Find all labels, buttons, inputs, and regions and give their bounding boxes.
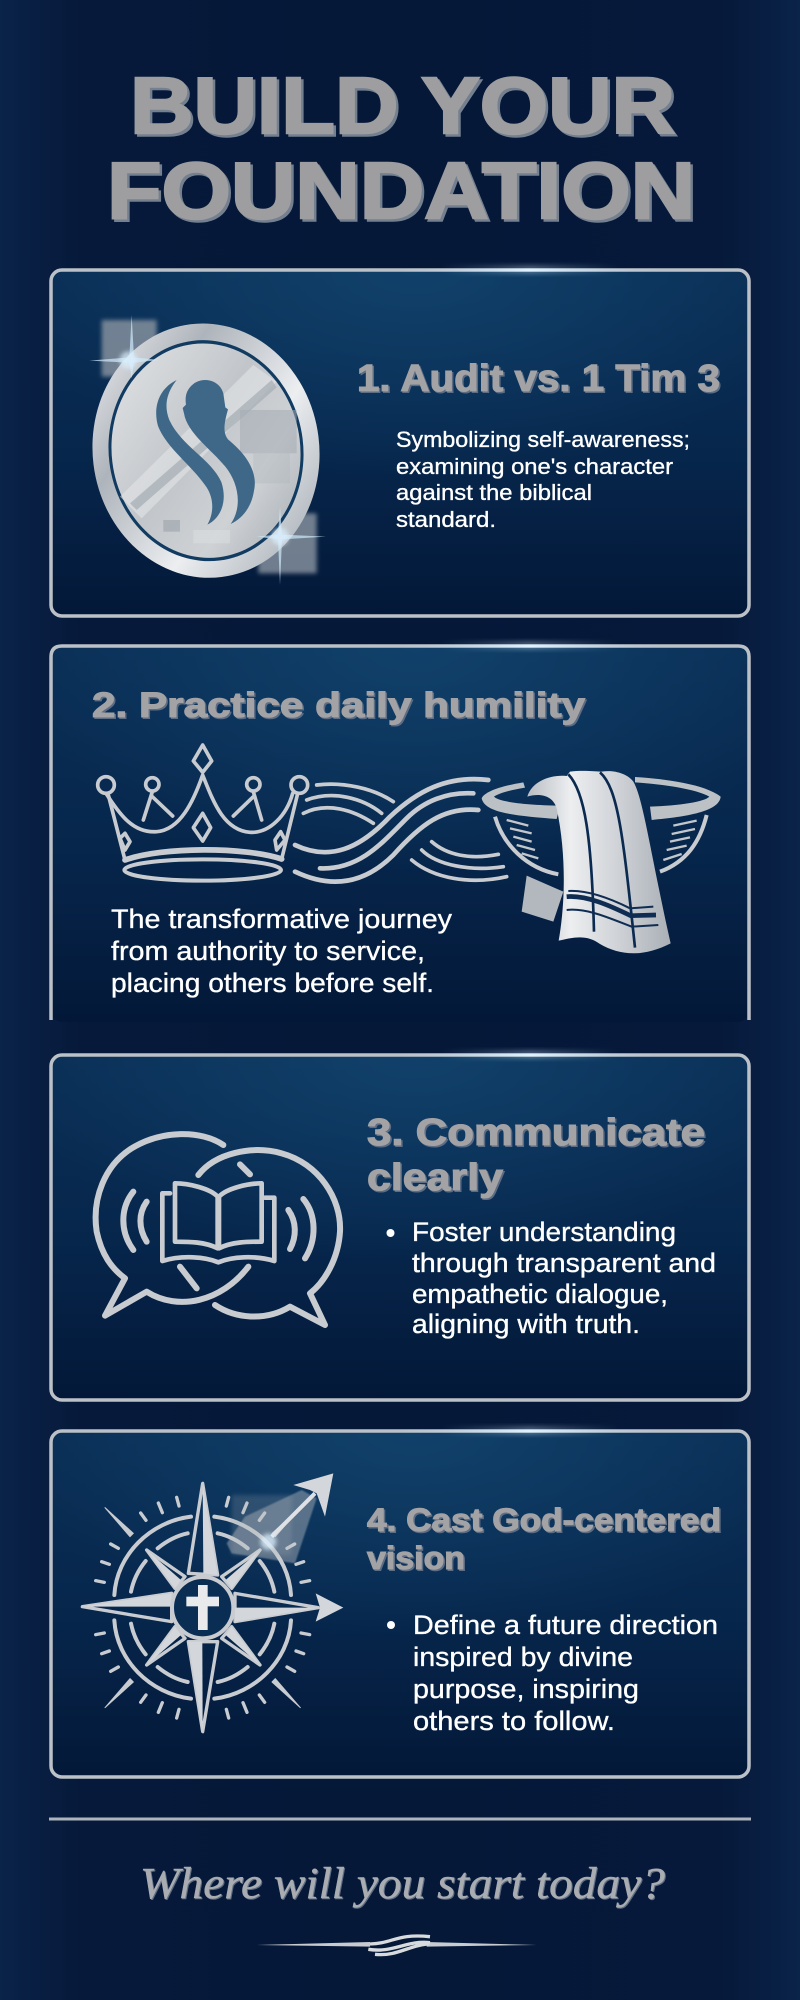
heading 2: 2. Practice daily humility — [94, 688, 587, 726]
heading 2: 2. Practice daily humility — [92, 686, 586, 725]
text 4 — [387, 1610, 718, 1736]
text 1: examining one's character — [396, 454, 674, 479]
icon: interwoven waves — [295, 779, 507, 882]
heading 4: 4. Cast God-centered — [367, 1502, 721, 1538]
text 4: inspired by divine — [413, 1642, 633, 1672]
icon: mirror coin — [78, 310, 334, 591]
heading 3: 3. Communicate — [367, 1112, 705, 1154]
text 2: from authority to service, — [111, 936, 425, 966]
panel 2: humility — [51, 641, 749, 1022]
divider — [49, 1818, 751, 1820]
closing question: Where will you start today? — [141, 1860, 666, 1909]
icon: basin and towel — [482, 771, 721, 953]
text 4: others to follow. — [413, 1706, 615, 1736]
panel 3: communicate — [51, 1050, 749, 1400]
text 2 — [111, 904, 453, 998]
icon: speech bubbles with book — [96, 1134, 340, 1325]
heading 3 — [367, 1112, 706, 1200]
text 2: placing others before self. — [111, 968, 434, 998]
text 3: aligning with truth. — [412, 1309, 640, 1339]
heading 3: clearly — [367, 1157, 503, 1199]
heading 3: 3. Communicate — [368, 1114, 706, 1156]
title: FOUNDATION — [110, 148, 698, 238]
text 1: Symbolizing self-awareness; — [396, 427, 690, 452]
icon: compass with cross — [82, 1473, 343, 1732]
text 1: standard. — [396, 507, 496, 532]
title: BUILD YOUR — [130, 61, 675, 150]
title: BUILD YOUR — [132, 64, 678, 152]
text 3 — [386, 1217, 716, 1339]
text 4: Define a future direction — [413, 1610, 718, 1640]
heading 1: 1. Audit vs. 1 Tim 3 — [357, 358, 720, 400]
text 1 — [396, 427, 690, 532]
panel 1: audit — [51, 265, 749, 616]
title: FOUNDATION — [107, 146, 695, 235]
text 4: purpose, inspiring — [413, 1674, 639, 1704]
closing question: Where will you start today? — [140, 1859, 665, 1908]
icon: crown — [98, 745, 308, 881]
text 2: The transformative journey — [111, 904, 453, 934]
panel 4: vision — [51, 1426, 749, 1777]
text 3: through transparent and — [412, 1248, 716, 1278]
heading 4: vision — [368, 1542, 466, 1578]
title — [107, 61, 698, 238]
text 3: empathetic dialogue, — [412, 1279, 668, 1309]
heading 4: vision — [367, 1540, 465, 1576]
ornament — [257, 1936, 537, 1955]
text 1: against the biblical — [396, 480, 592, 505]
heading 4: 4. Cast God-centered — [368, 1504, 722, 1540]
heading 1: 1. Audit vs. 1 Tim 3 — [358, 360, 722, 402]
text 3: Foster understanding — [412, 1217, 676, 1247]
heading 4 — [367, 1502, 722, 1578]
heading 3: clearly — [368, 1158, 504, 1200]
